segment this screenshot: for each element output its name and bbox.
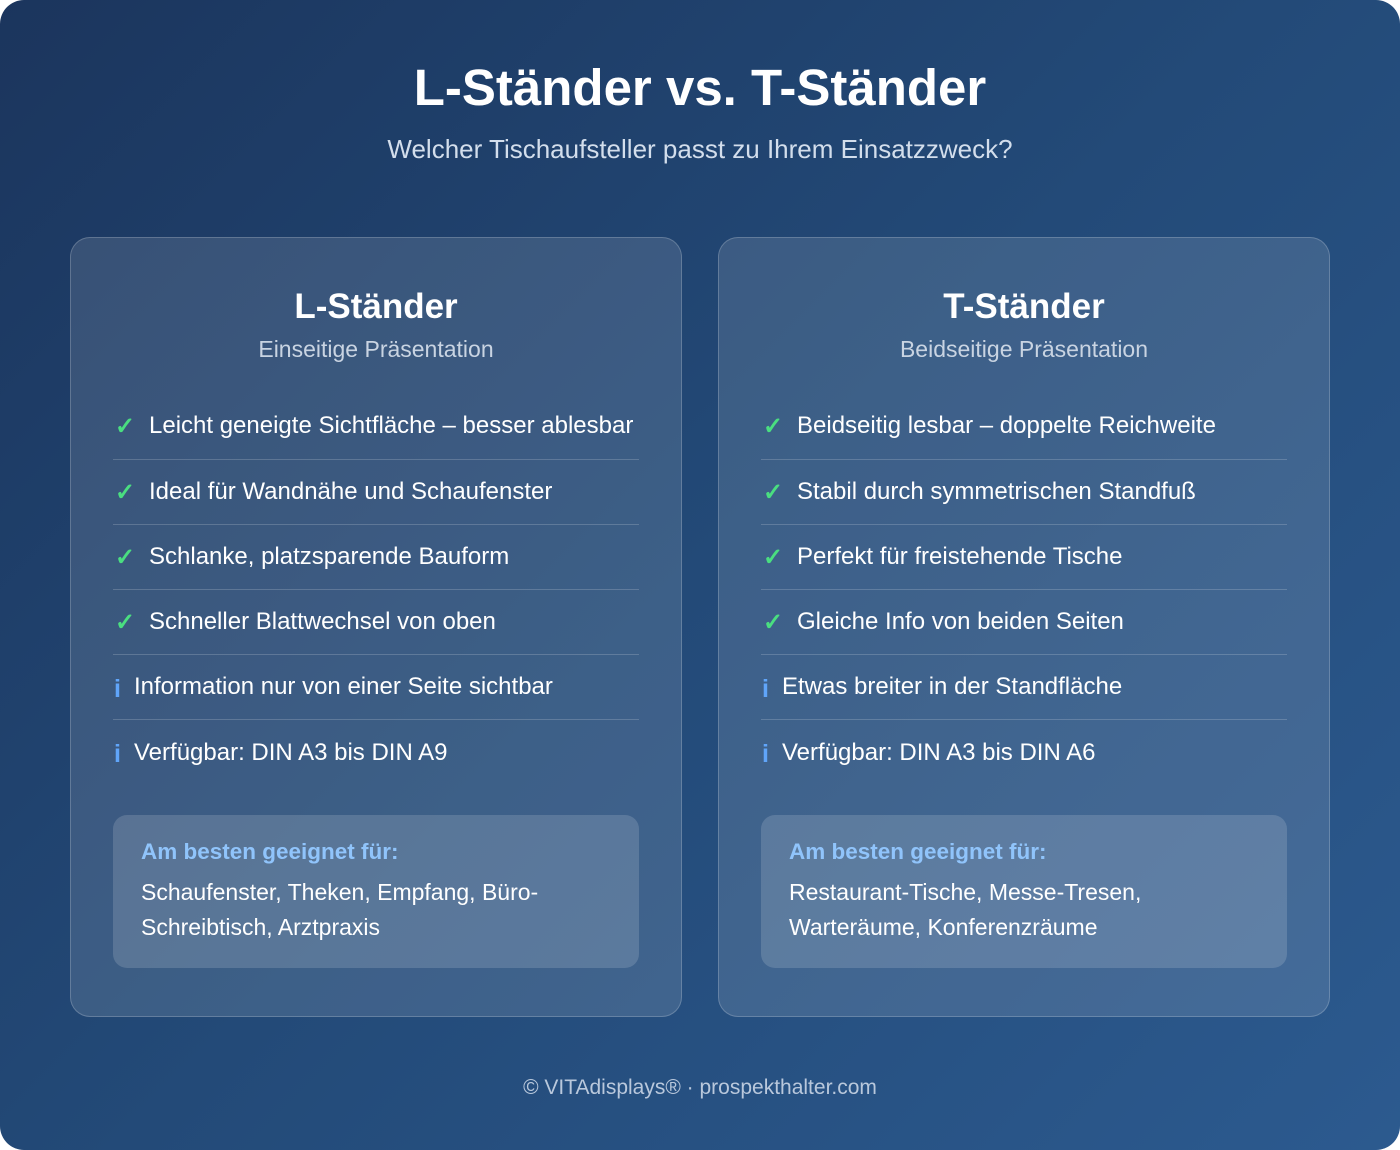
feature list: i (762, 675, 769, 703)
feature list: Etwas breiter in der Standfläche (782, 673, 1122, 700)
feature list: ✓ (763, 544, 783, 571)
subtitle: Welcher Tischaufsteller passt zu Ihrem Einsatzzweck? (387, 134, 1013, 164)
feature list: ✓ (763, 479, 783, 506)
feature list (761, 412, 1287, 768)
feature list: Stabil durch symmetrischen Standfuß (797, 478, 1196, 505)
callout: best for: Am besten geeignet für: (789, 839, 1047, 864)
feature list: Gleiche Info von beiden Seiten (797, 608, 1124, 635)
panel: T-Ständer (718, 237, 1330, 1017)
feature list: Information nur von einer Seite sichtbar (134, 673, 553, 700)
callout: best for (113, 815, 639, 968)
feature list: Leicht geneigte Sichtfläche – besser ablesbar (149, 412, 633, 439)
card heading: L-Ständer (294, 287, 458, 326)
callout: best for: Restaurant-Tische, Messe-Tresen, Warteräume, Konferenzräume (789, 879, 1141, 940)
feature list: ✓ (115, 609, 135, 636)
feature list: ✓ (763, 609, 783, 636)
feature list: Beidseitig lesbar – doppelte Reichweite (797, 412, 1216, 439)
feature list: ✓ (115, 544, 135, 571)
feature list: i (114, 740, 121, 768)
footer: © VITAdisplays® · prospekthalter.com (523, 1076, 877, 1099)
panel: L-Ständer (70, 237, 682, 1017)
feature list: i (762, 740, 769, 768)
feature list: ✓ (115, 413, 135, 440)
title: L-Ständer vs. T-Ständer (414, 59, 986, 116)
feature list: Schneller Blattwechsel von oben (149, 608, 496, 635)
feature list: Verfügbar: DIN A3 bis DIN A6 (782, 739, 1096, 766)
feature list: Schlanke, platzsparende Bauform (149, 543, 509, 570)
callout: best for (761, 815, 1287, 968)
feature list: Perfekt für freistehende Tische (797, 543, 1122, 570)
callout: best for: Am besten geeignet für: (141, 839, 399, 864)
callout: best for: Schaufenster, Theken, Empfang, Büro-Schreibtisch, Arztpraxis (141, 879, 538, 940)
card subheading: Beidseitige Präsentation (900, 336, 1148, 362)
feature list: Ideal für Wandnähe und Schaufenster (149, 478, 552, 505)
feature list: ✓ (763, 413, 783, 440)
feature list (113, 412, 639, 768)
feature list: ✓ (115, 479, 135, 506)
feature list: Verfügbar: DIN A3 bis DIN A9 (134, 739, 448, 766)
card subheading: Einseitige Präsentation (258, 336, 494, 362)
feature list: i (114, 675, 121, 703)
card heading: T-Ständer (943, 287, 1105, 326)
